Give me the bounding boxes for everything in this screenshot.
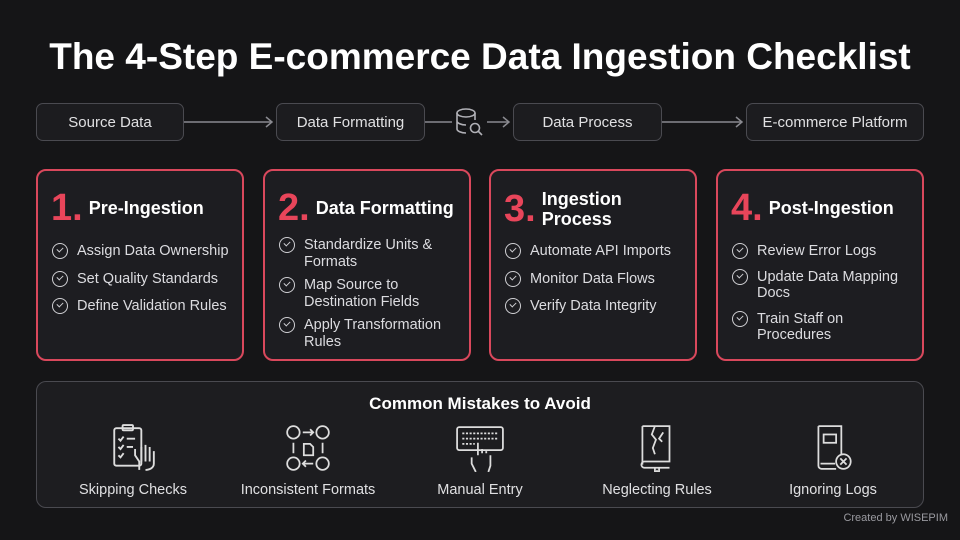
card 3: 3.	[504, 188, 536, 230]
flow: Data Formatting	[276, 103, 425, 141]
card 2: Rules	[304, 334, 341, 350]
mistake: ignoring logs	[789, 425, 877, 498]
card 3: Process	[542, 209, 612, 229]
card 3	[489, 169, 697, 361]
card 4: Procedures	[757, 327, 831, 343]
flow: Source Data: Source Data	[68, 114, 152, 130]
icon: database search	[457, 109, 482, 135]
mistake: ignoring logs: Ignoring Logs	[789, 482, 877, 498]
card 2: 2.	[278, 187, 310, 229]
mistake: inconsistent formats: Inconsistent Formats	[241, 482, 375, 498]
card 4: Review Error Logs	[757, 243, 876, 259]
card 4	[716, 169, 924, 361]
flow: Data Formatting: Data Formatting	[297, 114, 404, 130]
card 4: Update Data Mapping	[757, 268, 898, 284]
flow diagram	[184, 108, 743, 136]
card 1	[36, 169, 244, 361]
card 2: Apply Transformation	[304, 317, 441, 333]
card 1: Define Validation Rules	[77, 298, 227, 314]
card 1: Pre-Ingestion	[89, 198, 204, 218]
card 3: Ingestion	[542, 189, 622, 209]
card 1: 1.	[51, 187, 83, 229]
flow: Source Data	[36, 103, 184, 141]
card 3: Verify Data Integrity	[530, 298, 657, 314]
card 1: Assign Data Ownership	[77, 243, 229, 259]
flow: E-commerce Platform: E-commerce Platform	[762, 114, 908, 130]
card 2: Destination Fields	[304, 294, 419, 310]
card 4: 4.	[731, 187, 763, 229]
credit: Created by WISEPIM	[843, 512, 948, 524]
panel: common mistakes	[36, 381, 924, 508]
mistake: manual entry: Manual Entry	[437, 482, 523, 498]
card 4: Docs	[757, 285, 790, 301]
card 1: Set Quality Standards	[77, 270, 218, 286]
card 3: Monitor Data Flows	[530, 270, 655, 286]
card 2: Map Source to	[304, 277, 398, 293]
card 2: Data Formatting	[316, 198, 454, 218]
title: The 4-Step E-commerce Data Ingestion Checklist	[49, 36, 911, 77]
card 4: Post-Ingestion	[769, 198, 894, 218]
flow: Data Process	[513, 103, 662, 141]
card 4: Train Staff on	[757, 310, 843, 326]
mistakes heading: Common Mistakes to Avoid	[369, 394, 591, 413]
mistake: inconsistent formats	[241, 425, 375, 498]
card 2: Standardize Units &	[304, 237, 432, 253]
mistake: skipping checks	[79, 424, 187, 498]
mistake: neglecting rules: Neglecting Rules	[602, 482, 712, 498]
flow: E-commerce Platform	[746, 103, 924, 141]
card 2	[263, 169, 471, 361]
mistake: neglecting rules	[602, 425, 712, 498]
mistake: manual entry	[437, 426, 523, 498]
flow: Data Process: Data Process	[542, 114, 633, 130]
card 2: Formats	[304, 254, 357, 270]
card 3: Automate API Imports	[530, 243, 671, 259]
mistake: skipping checks: Skipping Checks	[79, 482, 187, 498]
